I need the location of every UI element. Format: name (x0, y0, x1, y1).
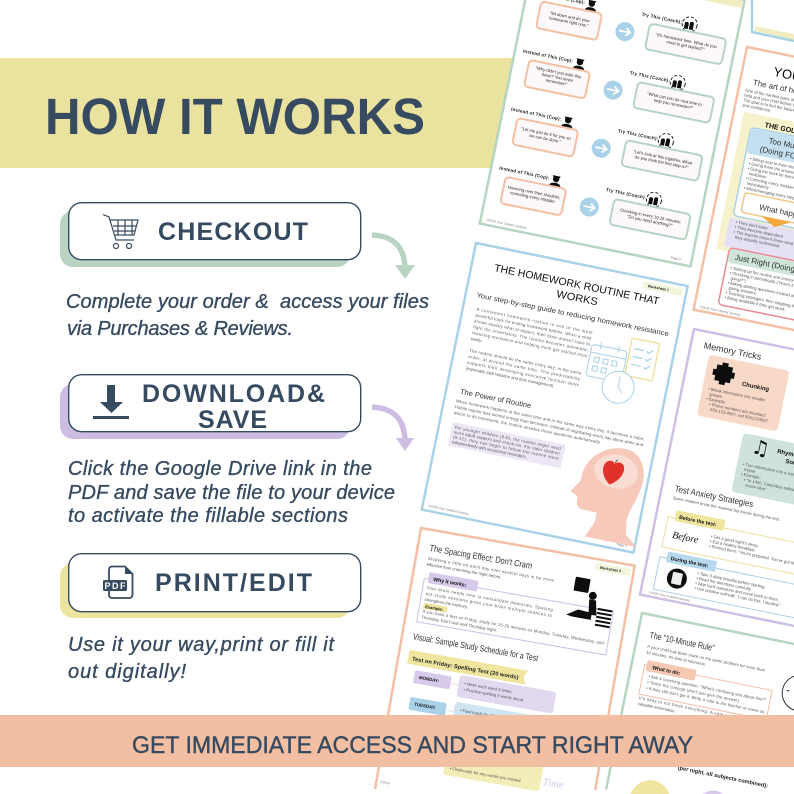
box: what happens: • They become dependent (734, 224, 784, 239)
box: chunking: Chunking (741, 382, 770, 393)
page: homework routine worksheet: The Power of Routine (459, 387, 532, 410)
row: hovering: Instead of This (Cop): (499, 165, 550, 181)
row: why didn't you: Instead of This (Cop): (523, 48, 574, 64)
intro paragraph: easily. (470, 336, 483, 343)
thursday row: • Flashcards for any words you missed. (449, 766, 522, 783)
box: rhymes and songs: ♫ (749, 434, 772, 461)
icon: calendar (586, 340, 628, 383)
box: why it works: If you have a test on Friday, study for 15-20 minutes on Monday, Tuesday, Wednesday, and (422, 609, 605, 646)
description (68, 634, 335, 683)
intro paragraph: (especially task initiation and time management). (465, 366, 555, 388)
row: let me do it (504, 102, 706, 182)
row: why didn't you: Try This (Coach): (629, 70, 671, 83)
row: why didn't you: "What can you do next time to (647, 91, 703, 107)
intro paragraph: The routine should be the same every day: in the same (469, 348, 582, 376)
button label: DOWNLOAD& (142, 380, 325, 408)
box: before the test: Before (671, 530, 700, 546)
ribbon: test on Friday: Test on Friday: Spelling Test (20 words) (412, 656, 519, 681)
description: to activate the fillable sections (68, 505, 348, 527)
title band (0, 58, 522, 168)
row: hovering: Try This (Coach): (606, 187, 647, 200)
callout: (9-12), they can begin to follow the routine more (452, 434, 560, 461)
box: what to do: valuable information. (637, 701, 676, 714)
row: let me do it: Try This (Coach): (618, 128, 659, 141)
box: chunking: • Phone numbers are chunked: (709, 402, 766, 418)
box: why it works: strengthen the memory. (424, 597, 468, 609)
page: homework routine worksheet: Habits require less mental energy than decisions. Instead of negotiating every day about when and (454, 404, 644, 447)
page: 10-minute rule worksheet: Guidelines (630, 756, 658, 767)
box: just right: giving answers (728, 285, 756, 296)
row: why didn't you: help you remember?" (653, 98, 694, 110)
button (69, 203, 361, 260)
box: why it works (417, 571, 615, 655)
box: during the test: • Take 3 deep breaths before starting. (697, 571, 766, 589)
box: during the test (653, 550, 794, 629)
button shadow (60, 211, 350, 267)
icon: download (93, 385, 129, 419)
page: homework routine worksheet: When homework happens at the same time and in the same way every day, it becomes a habit. (456, 398, 645, 441)
row: let me do it: "Let me just do it for you so (521, 126, 572, 141)
box: rhymes and songs: rhyme (744, 467, 757, 474)
page: spacing effect worksheet: ©2025 (380, 780, 390, 785)
arrow: green (372, 235, 415, 279)
icon: clock (599, 368, 637, 406)
description: Use it your way,print or fill it (68, 634, 335, 656)
bottom banner: GET IMMEDIATE ACCESS AND START RIGHT AWAY (132, 732, 693, 759)
button (69, 554, 361, 612)
decorative time circles (631, 780, 723, 794)
page: 10-minute rule worksheet: The "10-Minute Rule" (649, 630, 715, 653)
box: during the test: • Use positive self-talk: "I can do this. I studied." (694, 585, 782, 608)
button shadow (60, 384, 350, 439)
page: spacing effect worksheet: Time (542, 776, 565, 792)
row: hovering (492, 161, 694, 241)
page: top right blue worksheet corner (752, 0, 794, 41)
description (68, 458, 395, 527)
monday row: • Practice spelling 5 words aloud. (463, 687, 525, 703)
ribbon: test on Friday (407, 650, 528, 685)
row: hovering: Hovering over their shoulder, (507, 184, 561, 200)
row: let me do it: we can be done." (529, 133, 562, 144)
box: chunking: 555-123-4567, not 5551234567 (710, 407, 769, 424)
icon: head with apple (562, 440, 655, 547)
page: homework routine worksheet: Your step-by-step guide to reducing homework resistance (476, 292, 669, 338)
box: why it works: out study sessions gives your brain multiple chances to (425, 591, 553, 618)
box: before the test: • Eat a healthy breakfast. (710, 539, 756, 553)
page: homework routine worksheet: ©2025 Your Colorful Journey (428, 504, 469, 516)
arrow: lavender (372, 407, 414, 451)
box: what to do: • Teach the concept (don't just give the answer). (647, 680, 741, 703)
box: what to do: • Ask a coaching question: "What's confusing you about this?" (648, 674, 767, 703)
intro paragraph: A consistent homework routine is one of the most (476, 307, 594, 335)
box: chunking: groups (709, 391, 722, 399)
intro paragraph (464, 307, 594, 394)
row: hovering: correcting every mistake. (510, 190, 556, 204)
button (69, 375, 361, 432)
row: let me do it: Instead of This (Cop): (511, 107, 562, 122)
box: why it works: Thursday. Don't wait until Thursday night. (421, 614, 497, 633)
page: Your role as helper worksheet: and confidence. (742, 102, 772, 113)
description: out digitally! (68, 661, 186, 683)
row: hovering: "Do you need anything?" (627, 214, 673, 228)
box: why it works: Why it works: (433, 577, 467, 589)
icon: shopping cart (103, 214, 138, 248)
page: 10-minute rule worksheet: If your child has been stuck on the same problem for more than (647, 644, 766, 673)
box: what happens: • They don't learn (735, 219, 769, 231)
box: chunking: • Example: (706, 396, 727, 405)
row: why didn't you: "Why didn't you write this (535, 65, 582, 79)
page: homework routine worksheet: where to do homework, the routine answers those questions automatically. (453, 410, 601, 445)
page: Your role as helper worksheet (694, 47, 794, 353)
page: memory tricks worksheet: Some children know the material but freeze during the test. (672, 495, 781, 522)
page: 10-minute rule worksheet: (per night, all subjects combined): (677, 765, 769, 790)
box: just right (718, 248, 794, 342)
row: sit down: need to get started?" (666, 39, 705, 52)
row: sit down: "Sit down and do your (549, 10, 591, 23)
box: just right: going?") (730, 275, 747, 284)
button label: SAVE (198, 406, 267, 434)
row: sit down: Try This (Coach): (641, 12, 683, 25)
page: memory tricks worksheet (640, 329, 794, 638)
tuesday row: TUESDAY: (414, 702, 437, 710)
bottom banner (0, 715, 794, 767)
document previews (375, 0, 794, 794)
intro paragraph: powerful tools for ending homework battles. When a child (475, 312, 592, 341)
page: memory tricks worksheet: Test Anxiety Strategies (674, 483, 755, 509)
box: what to do (636, 660, 773, 732)
row: let me do it: "Let's look at this together. What (633, 149, 693, 166)
box: too much help: • Correcting every mistake (745, 175, 794, 190)
page: Your role as helper worksheet: ©2025 Your Colorful Journey (700, 305, 741, 317)
page: spacing effect worksheet: Studying a little bit each day over several days is far more (427, 556, 555, 583)
monday row (412, 667, 557, 714)
page: homework routine worksheet: Page 3 (616, 542, 627, 548)
box: rhymes and songs (731, 432, 794, 514)
tuesday row (407, 694, 552, 744)
icon: PDF file: PDF (104, 581, 126, 591)
description (66, 291, 429, 340)
box: what happens: they actually understand (734, 234, 781, 249)
box: too much help: immediately (746, 181, 770, 190)
page: cop vs coach worksheet (480, 0, 745, 266)
box: why it works: Your brain needs time to consolidate memories. Spacing (426, 585, 554, 612)
box: too much help: meltdown (748, 171, 768, 180)
row: sit down: "It's homework time. What do you (655, 32, 718, 49)
box: what happens: • The teacher doesn't know what (733, 229, 794, 246)
description: PDF and save the file to your device (68, 482, 395, 504)
row: let me do it: do you think the first step is?" (634, 154, 689, 170)
box: during the test: During the test: (670, 556, 709, 570)
tuesday row: • Flashcards for 10 minutes. (460, 708, 512, 722)
page: homework routine worksheet: WORKS (555, 288, 599, 308)
step: download and save (60, 375, 395, 527)
callout: independently with occasional reminders. (451, 439, 527, 459)
row: sit down: homework right now." (549, 15, 589, 28)
box: before the test: • Get a good night's sleep. (711, 534, 759, 548)
row: hovering: Checking in every 10-15 minutes: (620, 207, 682, 225)
box: during the test: • Skip hard questions and come back to them. (695, 580, 779, 602)
page: homework routine worksheet (422, 243, 690, 553)
page: spacing effect worksheet: Worksheet 3 (599, 566, 621, 573)
page: cop vs coach worksheet: Page 5 (670, 255, 681, 261)
monday row: MONDAY: (419, 675, 440, 683)
row: why didn't you (516, 44, 717, 124)
box: what happens (724, 191, 794, 284)
button shadow (60, 563, 350, 618)
page: homework routine worksheet: Worksheet 7 (647, 284, 669, 292)
page: 10-minute rule worksheet: 10 minutes, it's time to intervene. (646, 650, 707, 667)
row: sit down (528, 0, 729, 65)
description: Click the Google Drive link in the (68, 458, 372, 480)
icon: reader with books (565, 576, 617, 628)
box: rhymes and songs: • Example: (741, 471, 761, 480)
page: memory tricks worksheet: Memory Tricks (703, 340, 763, 362)
box: why it works: Example: (425, 604, 443, 612)
callout: For younger children (5-8), the routine might need (454, 425, 562, 451)
page: spacing effect worksheet: effective than cramming the night before. (426, 562, 502, 580)
box: what to do: What to do: (652, 665, 681, 677)
box: before the test: Before the test: (678, 515, 717, 528)
intro paragraph: reducing resistance and helping them get started more (472, 330, 589, 359)
box: chunking: • Break information into smaller (708, 386, 766, 403)
box: what to do: It's okay to not finish everything. A note gives the teacher (639, 695, 763, 725)
box: before the test (662, 509, 794, 587)
page: memory tricks worksheet: ©2025 Your Colorful Journey (649, 590, 690, 603)
page: 10-minute rule worksheet (606, 613, 794, 794)
callout: more adult support and check-ins. For older children (453, 429, 561, 456)
button label (142, 380, 325, 434)
intro paragraph: order, at around the same time. This predictability (468, 354, 581, 382)
page: spacing effect worksheet (375, 528, 635, 794)
intro paragraph: fight the uncertainty. The routine becomes automatic, (473, 324, 589, 353)
box: chunking (697, 355, 790, 432)
intro paragraph: supports their developing executive function skills (467, 360, 579, 387)
button label: PRINT/EDIT (155, 569, 312, 597)
box: just right: • Checking in periodically ("How's it (729, 270, 794, 288)
page: cop vs coach worksheet: ©2025 Your Colorful Journey (486, 218, 527, 230)
icon: clock (779, 672, 794, 714)
button label: CHECKOUT (158, 218, 308, 246)
step: print or edit (60, 554, 361, 683)
box: what to do: • If they still don't get it: Write a note to the teacher or move on. (646, 685, 766, 715)
box: rhymes and songs: ocean blue" (744, 482, 768, 492)
box: too much help: • Micromanaging every step (743, 185, 794, 201)
step: checkout (60, 203, 429, 340)
intro paragraph: knows exactly what to expect, their brain doesn't have to (474, 318, 591, 347)
box: during the test: • Read the directions carefully. (696, 576, 752, 592)
row: why didn't you: down? You never (541, 72, 574, 83)
row: why didn't you: remember!" (545, 78, 568, 87)
page: spacing effect worksheet: Visual: Sample Study Schedule for a Test (412, 631, 539, 663)
description: Complete your order & access your files (66, 291, 429, 313)
box: just right: • Asking guiding questions instead of (727, 280, 794, 299)
icon: PDF file (103, 566, 132, 598)
thursday row (443, 744, 544, 792)
box: too much help (733, 127, 794, 252)
big title: HOW IT WORKS (45, 88, 425, 145)
page: spacing effect worksheet: The Spacing Effect: Don't Cram (429, 543, 533, 571)
box: just right: • Being available if they get stuck (724, 295, 786, 312)
callout (448, 422, 566, 468)
icon: checklist (625, 338, 660, 381)
description: via Purchases & Reviews. (67, 318, 293, 340)
page: homework routine worksheet: THE HOMEWORK ROUTINE THAT (493, 262, 661, 308)
monday row: • Write each word 3 times. (464, 681, 513, 694)
